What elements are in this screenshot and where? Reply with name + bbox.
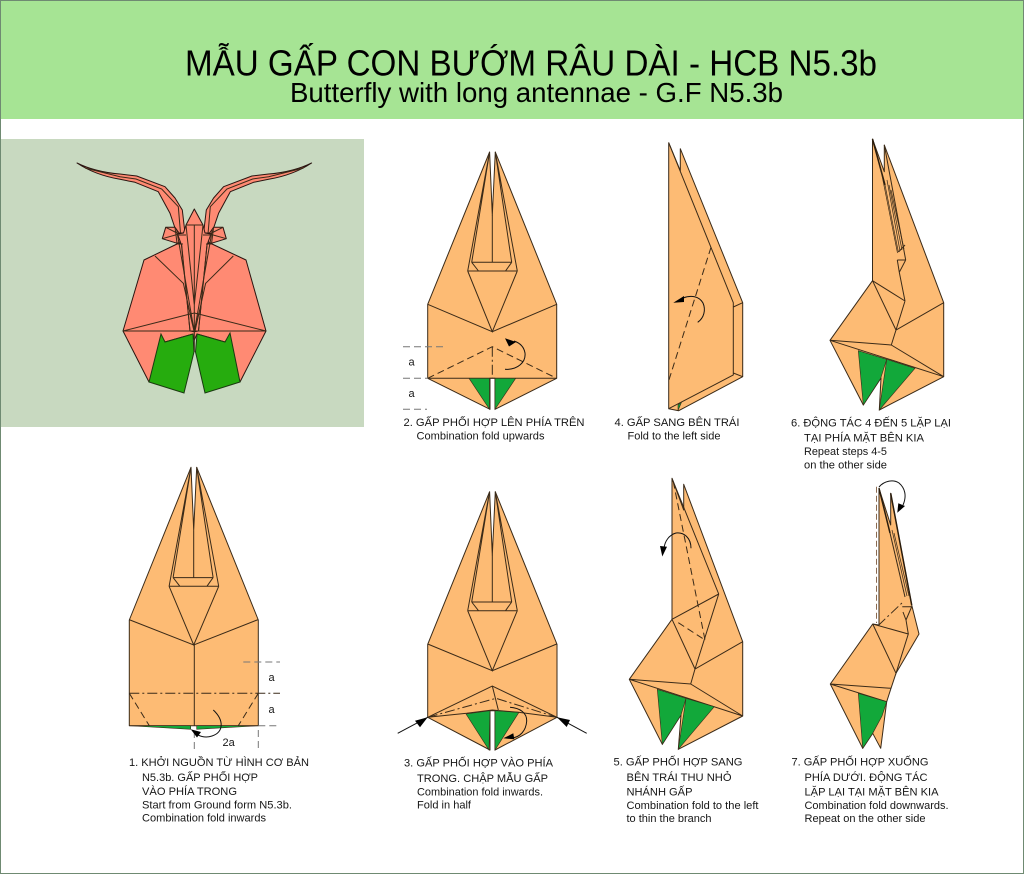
step 6 diagram [830,139,944,410]
step 5 diagram [629,478,743,749]
fold arrow [505,338,525,369]
fold arrow [879,481,905,513]
step 4 caption: 4. GẤP SANG BÊN TRÁI [614,416,740,429]
fold arrow [503,707,527,739]
title: MẪU GẤP CON BƯỚM RÂU DÀI - HCB N5.3b [185,42,877,84]
header band [0,0,1024,119]
step 4 caption: Fold to the left side [628,430,720,442]
fold lines [428,686,557,717]
step 1 caption: Start from Ground form N5.3b. [142,800,292,812]
step 1 caption [129,756,309,824]
step 2 caption [404,415,585,442]
subtitle: Butterfly with long antennae - G.F N5.3b [290,77,783,108]
step 3 caption: 3. GẤP PHỐI HỢP VÀO PHÍA [404,756,554,770]
hatched folded edge [872,139,904,253]
step 4 caption [614,416,740,442]
dimension labels: a [268,672,276,684]
dimension labels: a [408,356,416,368]
head and central folds [177,209,212,352]
step 5 caption: 5. GẤP PHỐI HỢP SANG [614,754,742,768]
dimension labels: 2a [222,737,236,749]
hatched folded edge [879,488,912,605]
right ear flap [205,227,226,243]
right green wing [196,333,240,393]
step 7 diagram [830,481,919,748]
step 5 caption: Combination fold to the left [626,800,758,812]
step 1 caption: Combination fold inwards [142,812,266,824]
fold arrow [191,710,221,738]
step 7 caption [792,754,948,825]
fold arrow [673,296,704,322]
step 2 diagram [403,152,557,409]
step 4 diagram [669,143,743,411]
step 2 caption: Combination fold upwards [416,430,545,442]
right antenna [204,163,312,233]
step 7 caption: LẶP LẠI TẠI MẶT BÊN KIA [804,786,939,798]
step 7 caption: PHÍA DƯỚI. ĐỘNG TÁC [804,771,928,784]
left ear flap [162,227,184,243]
green sliver [129,726,258,729]
fold line [876,487,878,623]
left antenna [77,163,185,233]
fold line [669,247,711,381]
dimension labels: a [408,388,416,400]
green triangles [469,378,516,409]
step 3 caption: Combination fold inwards. [417,786,543,798]
green triangles [466,711,519,750]
step 3 caption: Fold in half [417,800,472,812]
step 3 caption [404,756,554,812]
dimension labels: a [268,704,276,716]
green flap [858,693,887,748]
green corner [678,402,682,410]
wing fold lines [123,256,266,331]
step 6 caption: 6. ĐỘNG TÁC 4 ĐẾN 5 LẶP LẠI [791,416,951,430]
step 5 caption [614,754,758,825]
step 2 caption: 2. GẤP PHỐI HỢP LÊN PHÍA TRÊN [404,415,585,429]
fold guide lines [428,347,557,378]
right push arrow [557,717,587,733]
step 7 caption: Repeat on the other side [804,813,926,825]
step 3 caption: TRONG. CHẬP MẪU GẤP [417,772,548,785]
left push arrow [398,717,428,733]
step 6 caption [791,416,951,472]
green flaps [657,689,714,749]
step 1 caption: VÀO PHÍA TRONG [142,785,237,798]
dimension labels [222,672,276,749]
step 5 caption: NHÁNH GẤP [626,786,692,798]
panel: finished butterfly [0,139,364,427]
fold arrow [660,533,691,556]
dimension labels [408,356,416,400]
wing body [123,240,266,382]
step 6 caption: on the other side [804,460,887,472]
fold lines [673,482,705,640]
step 7 caption: 7. GẤP PHỐI HỢP XUỐNG [792,754,928,768]
fold guide lines [129,692,280,694]
green flaps [858,351,915,410]
step 3 diagram [398,492,587,750]
left green wing [149,334,194,393]
step 1 caption: 1. KHỞI NGUỒN TỪ HÌNH CƠ BẢN [129,756,309,769]
step 6 caption: Repeat steps 4-5 [804,446,887,458]
step 5 caption: BÊN TRÁI THU NHỎ [626,771,732,784]
step 7 caption: Combination fold downwards. [804,800,948,812]
step 1 diagram [129,467,280,750]
step 5 caption: to thin the branch [626,813,712,825]
step 6 caption: TẠI PHÍA MẶT BÊN KIA [804,432,925,444]
step 1 caption: N5.3b. GẤP PHỐI HỢP [142,770,258,784]
